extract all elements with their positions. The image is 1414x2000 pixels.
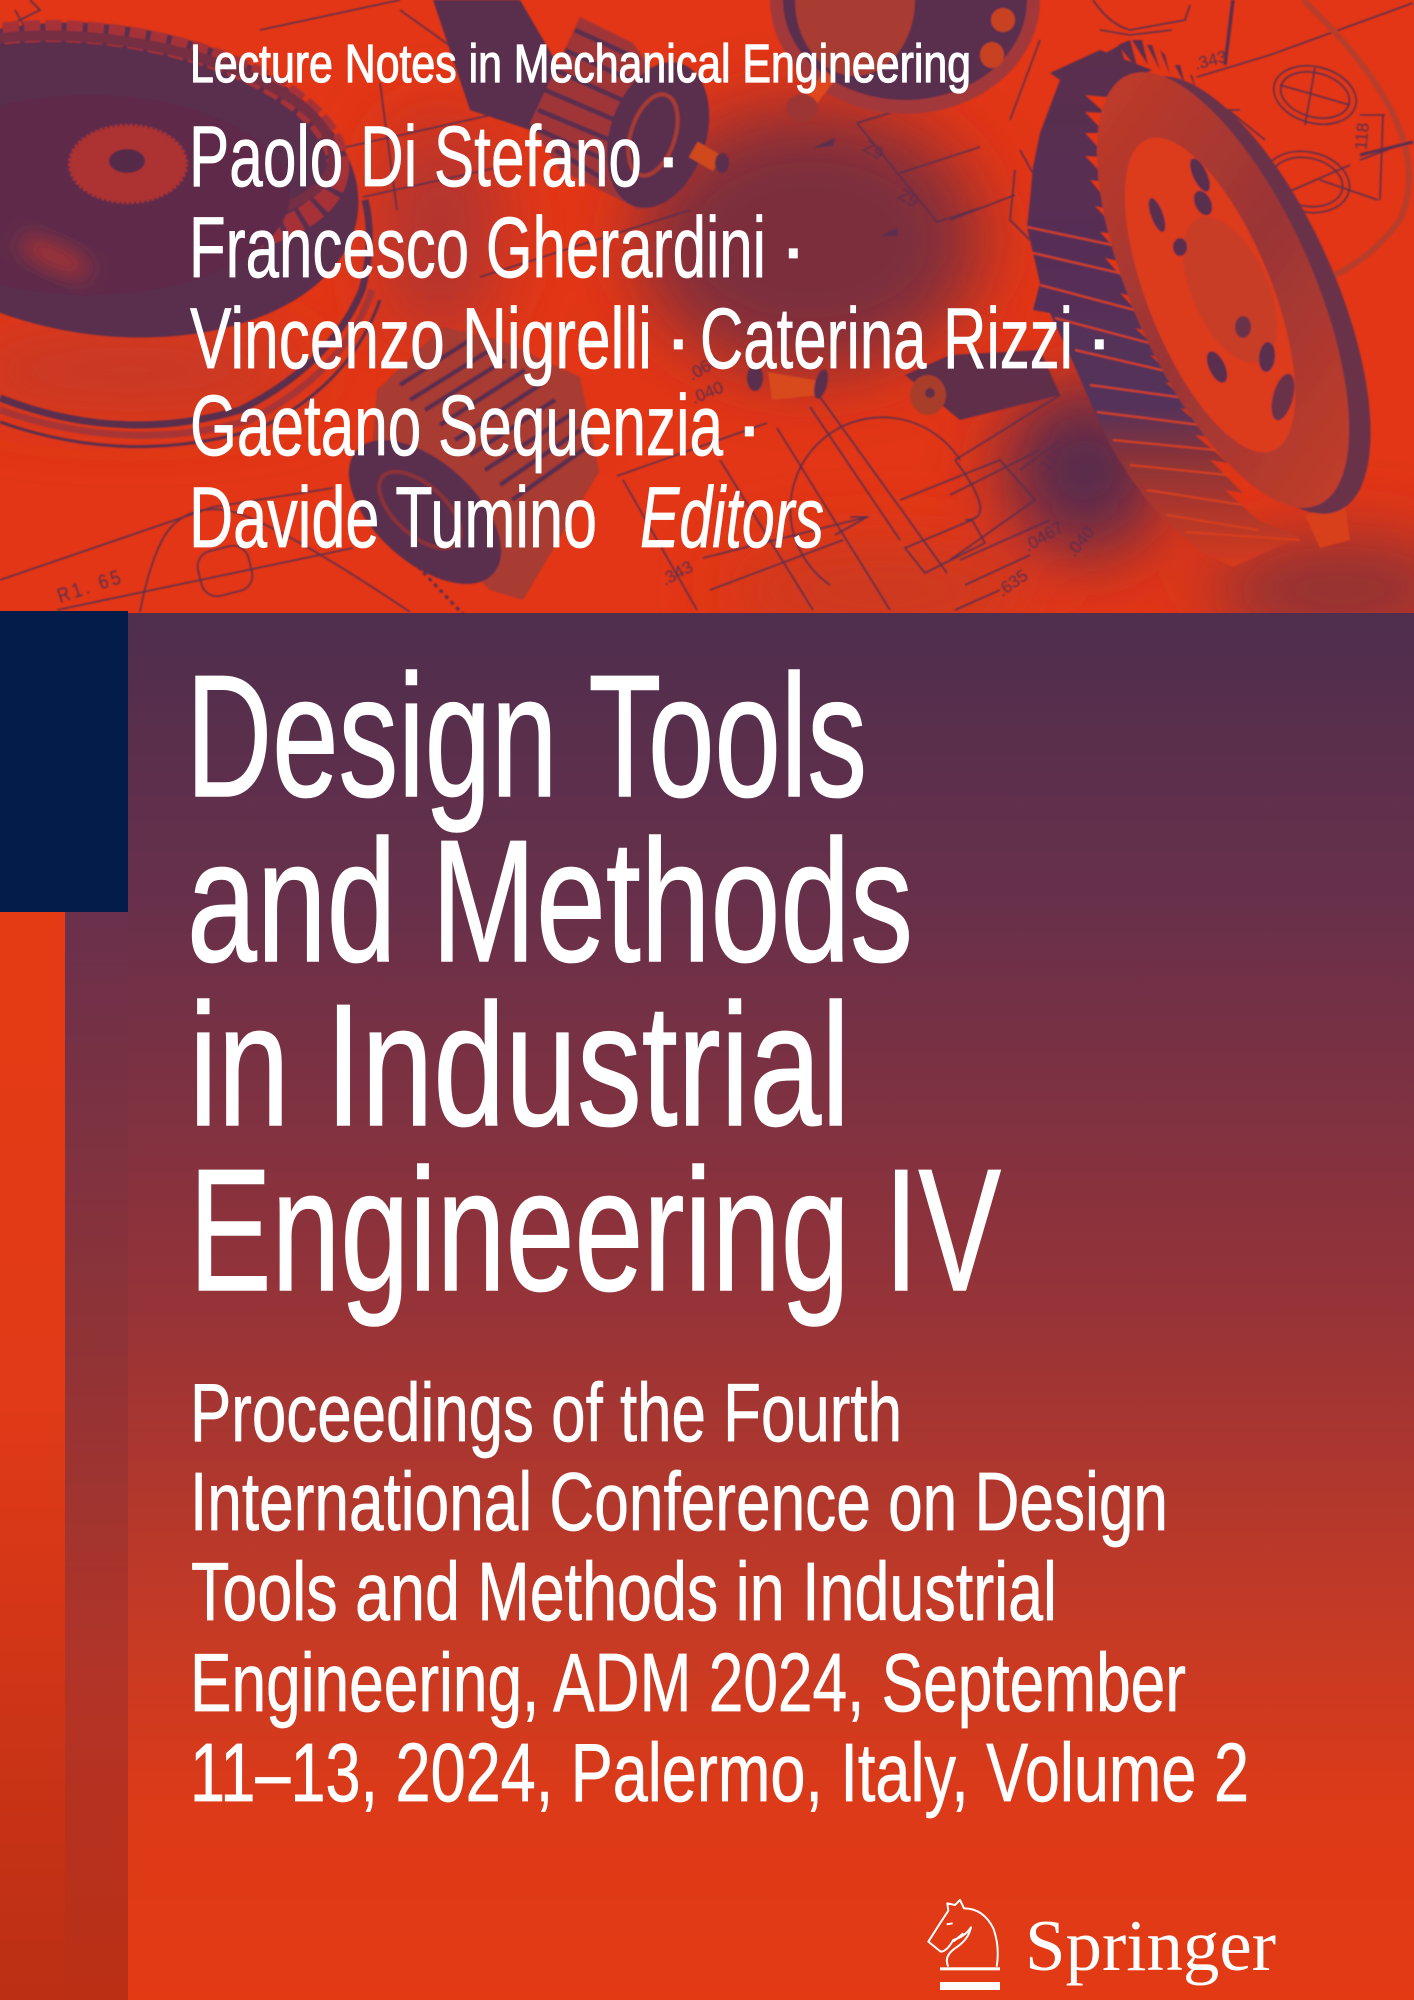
labels: drawing dimensions: .635 (993, 566, 1031, 600)
text: editors: Gaetano Sequenzia (190, 378, 723, 474)
text: subtitle: Tools and Methods in Industrial (191, 1545, 1057, 1638)
text: editors: · (1085, 291, 1114, 387)
labels: drawing dimensions: .040 (688, 378, 726, 408)
text: series title: Lecture Notes in Mechanical Engineering (190, 34, 971, 94)
labels: drawing dimensions: .060 (684, 351, 723, 384)
icon: upper bearing (770, 0, 1040, 122)
labels: drawing dimensions: .343 (1192, 47, 1229, 74)
logo: Springer (928, 1900, 1276, 1990)
heading: book title: in Industrial (189, 967, 850, 1162)
labels: drawing dimensions: .343 (658, 557, 696, 590)
icon: chess knight (928, 1900, 1000, 1990)
text: editors: Francesco Gherardini (189, 200, 766, 296)
panel: left orange stripe (0, 912, 65, 2000)
text: editors: Vincenzo Nigrelli (190, 291, 652, 387)
panel: cover photo of gears and technical drawing (0, 0, 1414, 640)
panel: title band gradient (128, 613, 1414, 2000)
text: editors: · (654, 109, 683, 205)
drawing: technical lines (0, 0, 1413, 612)
panel: navy block (0, 611, 128, 912)
icon: lower finned pulley (323, 327, 660, 629)
text: editors: Caterina Rizzi (700, 291, 1073, 387)
heading: book title: and Methods (187, 803, 913, 998)
labels: drawing dimensions: .118 (1351, 122, 1373, 155)
icon: small drawing arrows (813, 138, 898, 236)
text: editors: Editors (640, 470, 824, 566)
icon: drive belt (0, 200, 380, 447)
panel: left dark stripe (65, 912, 128, 2000)
heading: book title (186, 638, 1001, 1327)
text: editors: · (779, 200, 808, 296)
text: Springer wordmark: Springer (1025, 1905, 1276, 1986)
labels: drawing dimensions: .040 (1063, 523, 1098, 561)
icon: flange arc (1303, 0, 1409, 277)
text: editors (189, 109, 1114, 566)
heading: book title: Design Tools (186, 638, 867, 833)
icon: left timing pulley wheel (0, 19, 360, 338)
labels: drawing dimensions: .0467 (1020, 518, 1067, 555)
icon: upper finned pulley (433, 0, 729, 221)
labels: drawing dimensions: Z9 (860, 137, 887, 163)
labels: drawing dimensions: R1. 65 (54, 564, 126, 607)
text: editors: Paolo Di Stefano (189, 109, 642, 205)
labels: drawing dimensions: Z9 (895, 185, 922, 211)
text: subtitle: Proceedings of the Fourth (190, 1366, 902, 1459)
text: subtitle (190, 1366, 1249, 1819)
labels: drawing dimensions: .115 (1033, 442, 1068, 479)
text: editors: Davide Tumino (189, 470, 597, 566)
icon: large right gear (1026, 39, 1372, 567)
heading: book title: Engineering IV (189, 1132, 1001, 1327)
text: editors: · (735, 378, 764, 474)
icon: central shaft (747, 350, 1060, 420)
text: editors: · (664, 291, 693, 387)
labels: drawing dimensions (54, 47, 1373, 607)
